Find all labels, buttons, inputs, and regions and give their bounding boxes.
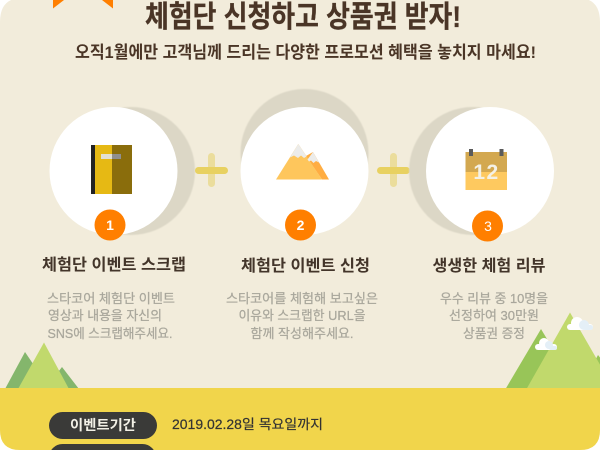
number badge 2: 2 xyxy=(297,217,305,233)
number badge 2 xyxy=(285,210,316,240)
icon: plus 1 xyxy=(195,153,228,187)
step 2 heading: 체험단 이벤트 신청 xyxy=(241,257,370,275)
icon: mountains xyxy=(276,144,329,180)
white circle 3 xyxy=(426,107,554,235)
white circle 1 xyxy=(50,107,178,235)
circle shadow 3 xyxy=(408,107,480,235)
event period date: 2019.02.28일 목요일까지 xyxy=(172,417,323,432)
icon: cloud large xyxy=(567,317,593,330)
number badge 1: 1 xyxy=(106,217,114,233)
step 1 description: 스타코어 체험단 이벤트 xyxy=(47,291,175,306)
icon: calendar: 12 xyxy=(473,161,500,184)
step 2 description: 함께 작성해주세요. xyxy=(250,326,354,341)
panel: step 1 xyxy=(42,107,195,341)
step 1 description: 영상과 내용을 자신의 xyxy=(48,308,162,323)
subtitle: 오직1월에만 고객님께 드리는 다양한 프로모션 혜택을 놓치지 마세요! xyxy=(75,43,536,62)
step 1 heading: 체험단 이벤트 스크랩 xyxy=(42,256,186,274)
white circle 2 xyxy=(240,107,368,235)
icon: orange ribbon xyxy=(53,0,113,8)
step 2 description: 스타코어를 체험해 보고싶은 xyxy=(226,291,378,306)
second pill xyxy=(49,444,156,450)
panel: step 2 xyxy=(226,89,378,341)
step 1 description: SNS에 스크랩해주세요. xyxy=(48,326,172,341)
icon: cloud small xyxy=(535,338,557,350)
step 1 description xyxy=(47,291,175,341)
step 3 description: 상품권 증정 xyxy=(463,326,525,341)
panel: step 3 xyxy=(409,107,554,341)
number badge 3 xyxy=(472,210,503,242)
panel: yellow info band xyxy=(0,388,600,450)
circle shadow 1 xyxy=(123,107,195,235)
step 2 description: 이유와 스크랩한 URL을 xyxy=(238,308,366,323)
title: 체험단 신청하고 상품권 받자! xyxy=(145,1,461,34)
event period pill: 이벤트기간 xyxy=(70,417,136,433)
step 3 heading: 생생한 체험 리뷰 xyxy=(432,257,546,275)
step 2 description xyxy=(226,291,378,341)
mountains left xyxy=(5,342,79,389)
circle shadow 2 xyxy=(240,89,368,162)
step 3 description: 선정하여 30만원 xyxy=(449,308,539,323)
event period pill xyxy=(49,412,157,439)
number badge 1 xyxy=(94,210,126,240)
icon: book xyxy=(91,145,132,194)
icon: calendar xyxy=(466,149,507,190)
icon: plus 2 xyxy=(377,153,410,187)
step 3 description xyxy=(440,291,548,341)
number badge 3: 3 xyxy=(484,218,492,234)
mountains right xyxy=(506,312,600,389)
step 3 description: 우수 리뷰 중 10명을 xyxy=(440,291,548,306)
